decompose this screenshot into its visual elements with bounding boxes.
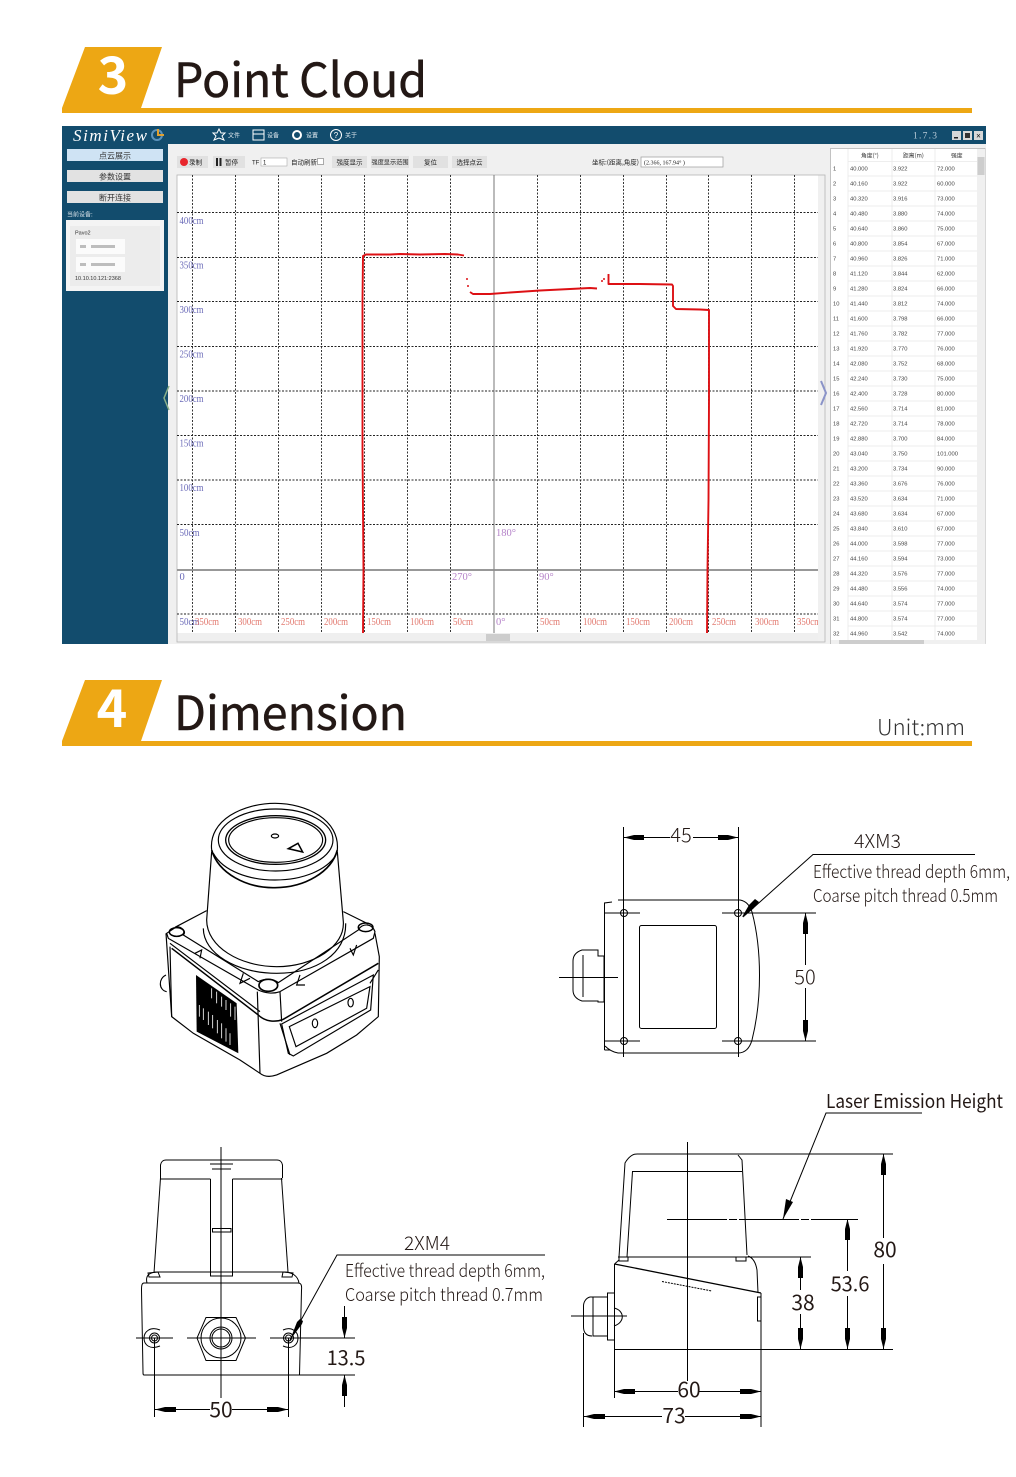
point cloud chart: 300cm [238,617,262,628]
data table: 3.860 [893,226,908,232]
data table: 3.676 [893,482,908,488]
data table: 44.960 [850,632,868,638]
data table: 66.000 [937,286,955,292]
point cloud chart: 0 [180,572,185,583]
data table: 41.600 [850,316,868,322]
toolbar: 选择点云 [456,156,483,166]
side view drawing with dimensions: Laser Emission Height [826,1087,1003,1114]
data table: 3.922 [893,182,908,188]
data table: 44.160 [850,556,868,562]
data table: 5 [833,226,836,232]
nav arrow left [164,386,169,410]
data table: 20 [833,452,839,458]
data table: 44.320 [850,572,868,578]
heading: section 4 Dimension: Dimension [174,675,407,744]
point cloud chart: 50cm [180,617,200,628]
point cloud chart: 300cm [180,305,204,316]
data table: 距离(m) [903,150,924,160]
data table: 8 [833,272,836,278]
toolbar: 自动刷新 [291,156,318,166]
data table: 77.000 [937,602,955,608]
sidebar [62,144,168,644]
unit label: Unit:mm [877,710,965,742]
data table: 40.160 [850,182,868,188]
data table: 7 [833,256,836,262]
data table: 43.680 [850,512,868,518]
data table: 3.880 [893,212,908,218]
data table: 3.610 [893,526,908,532]
point cloud chart: 150cm [626,617,650,628]
data table: 3.728 [893,392,908,398]
panel: SimiView software screenshot [62,126,986,644]
data table: 74.000 [937,212,955,218]
data table: 67.000 [937,526,955,532]
data table: 76.000 [937,346,955,352]
data table: 3.542 [893,632,908,638]
data table: 4 [833,212,837,218]
data table: 77.000 [937,616,955,622]
data table: 44.000 [850,542,868,548]
toolbar: 强度显示 [336,156,363,166]
data table: 68.000 [937,362,955,368]
point cloud chart: 400cm [180,216,204,227]
data table: 17 [833,406,839,412]
toolbar: 强度显示范围 [371,158,409,166]
data table: 42.560 [850,406,868,412]
data table: 42.240 [850,376,868,382]
top bar: 文件 [228,130,240,140]
data table: 3.730 [893,376,908,382]
front view drawing with dimensions [136,1147,545,1424]
data table: 74.000 [937,632,955,638]
data table: 26 [833,542,839,548]
data table: 84.000 [937,436,955,442]
data table: 15 [833,376,839,382]
data table: 66.000 [937,316,955,322]
data table: 101.000 [937,452,958,458]
data table: 43.360 [850,482,868,488]
top bar: SimiView [73,126,148,145]
data table: 23 [833,496,839,502]
side view drawing with dimensions: 60 [677,1374,701,1404]
point cloud chart: 180° [496,528,516,539]
data table: 90.000 [937,466,955,472]
data table: 42.400 [850,392,868,398]
side view drawing with dimensions: 73 [662,1400,686,1430]
point cloud chart [177,175,825,642]
data table: 3.782 [893,332,908,338]
data table [830,148,985,644]
data table: 40.000 [850,166,868,172]
data table: 43.200 [850,466,868,472]
data table: 32 [833,632,839,638]
data table: 3.922 [893,166,908,172]
point cloud chart: 350cm [797,617,821,628]
data table: 75.000 [937,376,955,382]
data table: 3.812 [893,302,908,308]
data table: 19 [833,436,839,442]
data table: 12 [833,332,839,338]
data table: 3.700 [893,436,908,442]
data table: 10 [833,302,839,308]
data table: 3 [833,196,836,202]
data table: 25 [833,526,839,532]
point cloud chart: 150cm [180,438,204,450]
data table: 3.752 [893,362,908,368]
isometric view of sensor [160,803,379,1076]
data table: 28 [833,572,839,578]
heading: section 3 Point Cloud: Point Cloud [174,42,427,111]
data table: 29 [833,586,839,592]
data table: 3.598 [893,542,908,548]
data table: 3.750 [893,452,908,458]
top view drawing with dimensions: 45 [670,819,692,848]
front view drawing with dimensions: 50 [209,1394,233,1424]
data table: 77.000 [937,332,955,338]
data table: 78.000 [937,422,955,428]
toolbar: TF [252,160,260,166]
data table: 9 [833,286,836,292]
data table: 42.080 [850,362,868,368]
data table: 角度(°) [861,150,879,160]
data table: 3.844 [893,272,908,278]
data table: 40.960 [850,256,868,262]
data table: 42.880 [850,436,868,442]
point cloud chart: 350cm [180,260,204,272]
point cloud chart: 100cm [410,617,434,628]
data table: 3.714 [893,422,908,428]
heading: section 4 Dimension [62,667,972,746]
front view drawing with dimensions: Effective thread depth 6mm, [345,1257,545,1283]
top bar: × [976,132,981,140]
data table: 24 [833,512,840,518]
data table: 40.800 [850,242,868,248]
data table: 31 [833,616,839,622]
data table: 3.574 [893,602,908,608]
data table: 62.000 [937,272,955,278]
sidebar: 当前设备: [67,210,93,218]
data table: 11 [833,316,839,322]
data table: 3.798 [893,316,908,322]
top bar [62,126,986,145]
data table: 3.556 [893,586,908,592]
data table: 41.760 [850,332,868,338]
point cloud chart: 270° [452,572,472,583]
top view drawing with dimensions: 4XM3 [854,827,901,854]
data table: 67.000 [937,512,955,518]
data table: 40.320 [850,196,868,202]
side view drawing with dimensions: 53.6 [831,1268,869,1297]
data table: 75.000 [937,226,955,232]
data table: 71.000 [937,496,955,502]
front view drawing with dimensions: 2XM4 [404,1229,450,1256]
data table: 72.000 [937,166,955,172]
data table: 强度 [951,150,963,160]
data table: 81.000 [937,406,955,412]
side view drawing with dimensions [571,1087,1003,1430]
top view drawing with dimensions [559,819,1010,1057]
data table: 73.000 [937,196,955,202]
sidebar: 断开连接 [99,192,131,204]
point cloud chart: 150cm [367,617,391,628]
toolbar: 暂停 [225,156,238,166]
point cloud chart: 250cm [180,350,204,360]
point cloud chart: 50cm [540,617,560,628]
data table: 30 [833,602,839,608]
side view drawing with dimensions: 80 [873,1234,897,1264]
top bar: 1.7.3 [913,132,937,142]
data table: 80.000 [937,392,955,398]
sidebar: Pavo2 [75,230,91,236]
toolbar: 录制 [189,156,202,166]
point cloud chart: 300cm [755,617,779,628]
data table: 73.000 [937,556,955,562]
top bar: 设置 [306,130,318,140]
sidebar: 参数设置 [99,172,131,182]
point cloud chart: 100cm [180,483,204,494]
data table: 27 [833,556,839,562]
point cloud chart: 250cm [281,617,305,628]
data table: 2 [833,182,836,188]
data table: 43.520 [850,496,868,502]
point cloud chart: 350cm [195,617,219,628]
heading: section 4 Dimension: 4 [97,667,127,742]
data table: 3.634 [893,512,908,518]
front view drawing with dimensions: Coarse pitch thread 0.7mm [345,1281,543,1307]
data table: 13 [833,346,839,352]
data table: 6 [833,242,836,248]
toolbar: 1 [263,160,267,166]
data table: 3.770 [893,346,908,352]
data table: 1 [833,166,836,172]
data table: 77.000 [937,572,955,578]
point cloud chart: 90° [539,572,554,583]
data table: 3.714 [893,406,908,412]
data table: 3.574 [893,616,908,622]
data table: 77.000 [937,542,955,548]
data table: 41.440 [850,302,868,308]
point cloud chart: 100cm [583,617,607,628]
data table: 43.040 [850,452,868,458]
data table: 14 [833,362,840,368]
data table: 41.920 [850,346,868,352]
top view drawing with dimensions: 50 [794,961,816,990]
data table: 3.916 [893,196,908,202]
point cloud chart: 250cm [712,617,736,628]
heading: section 3 Point Cloud [62,34,972,113]
toolbar: (2.366, 167.94° ) [644,160,685,166]
data table: 40.640 [850,226,868,232]
top bar: 关于 [345,130,357,140]
data table: 21 [833,466,839,472]
data table: 3.594 [893,556,908,562]
data table: 74.000 [937,586,955,592]
data table: 76.000 [937,482,955,488]
sidebar: 10.10.10.121:2368 [75,276,121,282]
data table: 67.000 [937,242,955,248]
data table: 16 [833,392,839,398]
point cloud trace [362,254,709,633]
data table: 42.720 [850,422,868,428]
data table: 3.576 [893,572,908,578]
data table: 41.280 [850,286,868,292]
data table: 44.480 [850,586,868,592]
data table: 40.480 [850,212,868,218]
point cloud chart: 0° [496,617,505,628]
point cloud chart: 50cm [180,528,200,539]
sidebar: 点云展示 [99,150,131,162]
data table: 3.826 [893,256,908,262]
data table: 43.840 [850,526,868,532]
data table: 74.000 [937,302,955,308]
data table: 71.000 [937,256,955,262]
data table: 3.854 [893,242,908,248]
nav arrow right [821,381,826,405]
data table: 22 [833,482,839,488]
data table: 18 [833,422,839,428]
data table: 41.120 [850,272,868,278]
side view drawing with dimensions: 38 [791,1287,815,1317]
point cloud chart: 200cm [180,394,204,405]
point cloud chart: 50cm [453,617,473,628]
heading: section 3 Point Cloud: 3 [98,34,128,109]
data table: 3.824 [893,286,908,292]
data table: 44.800 [850,616,868,622]
toolbar [177,156,723,168]
toolbar: 复位 [424,156,438,166]
point cloud chart: 200cm [669,617,693,628]
data table: 3.734 [893,466,908,472]
top bar: ? [334,131,339,140]
point cloud chart: 200cm [324,617,348,628]
top bar: 设备 [267,130,279,140]
toolbar: 坐标:(距离,角度) [592,156,639,166]
data table: 3.634 [893,496,908,502]
data table: 44.640 [850,602,868,608]
data table: 60.000 [937,182,955,188]
front view drawing with dimensions: 13.5 [327,1342,365,1371]
